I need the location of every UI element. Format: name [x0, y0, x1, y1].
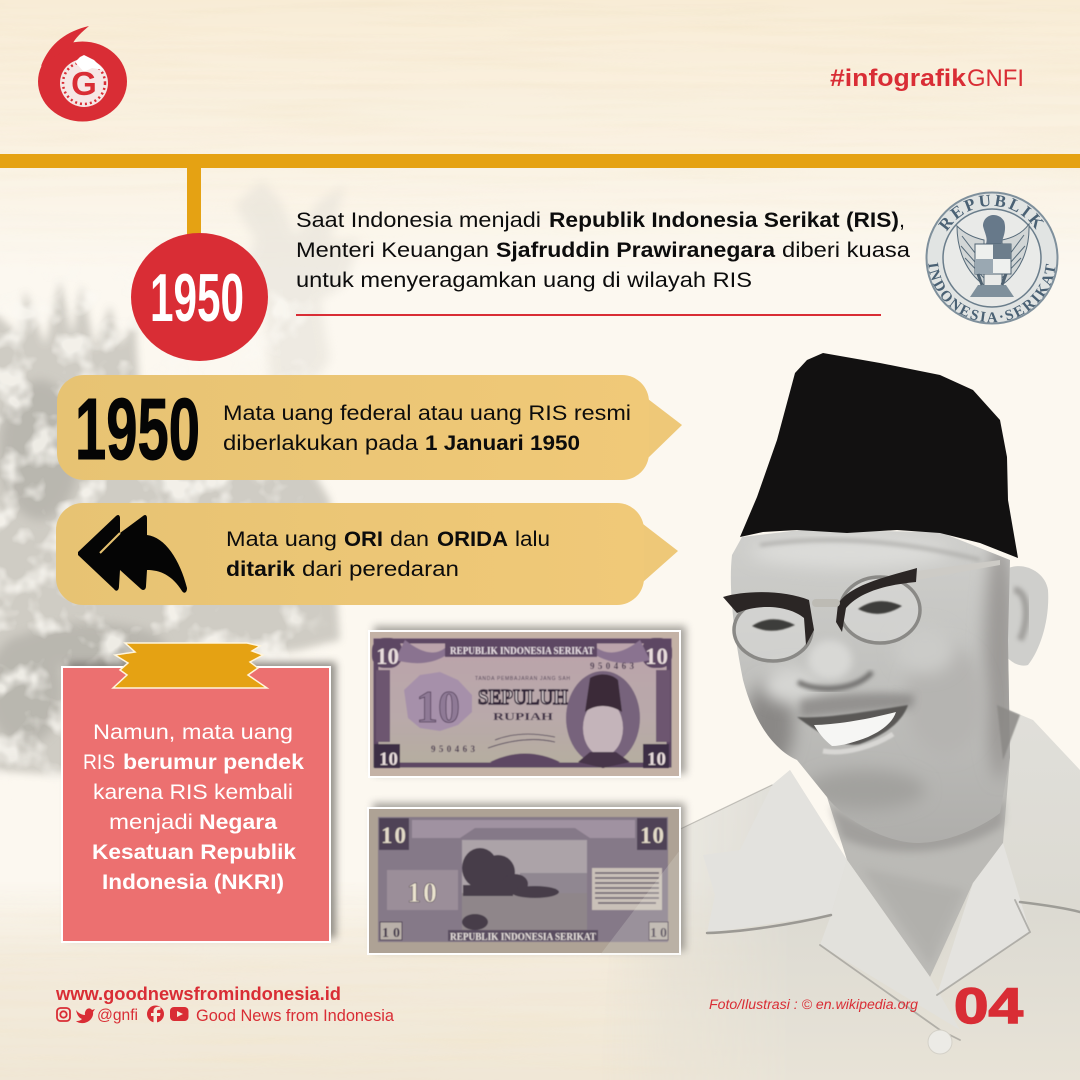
portrait of Sjafruddin Prawiranegara: [672, 353, 1080, 1054]
banknote back: 10 rupiah: 10: [407, 878, 437, 909]
band text: ditarik: [226, 557, 295, 581]
eyeglasses: [723, 560, 1000, 661]
seal: Republik Indonesia Serikat: INDONESIA·SERIKAT: [928, 262, 1056, 322]
band text: [226, 527, 550, 581]
portrait oval on note: [566, 671, 640, 768]
hashtag #infografikGNFI: #infografik: [830, 65, 967, 92]
year badge 1950: [131, 233, 268, 361]
footer website and social: [55, 984, 395, 1025]
tape: [113, 643, 267, 688]
banknote front: 10 rupiah: 10: [416, 681, 460, 732]
logo GNFI: [38, 26, 127, 122]
info band: 1 Januari 1950: [57, 375, 682, 480]
banknote front: 10 rupiah: 950463: [590, 661, 634, 671]
intro paragraph: ,: [899, 208, 905, 232]
intro paragraph: Saat Indonesia menjadi: [296, 208, 541, 232]
callout note: RIS short-lived: [62, 643, 336, 942]
note text: karena RIS kembali: [93, 780, 293, 804]
banknote back: 10 rupiah: REPUBLIK INDONESIA SERIKAT: [450, 932, 596, 943]
seal: Republik Indonesia Serikat: [926, 192, 1058, 324]
band text: diberlakukan pada: [223, 431, 418, 455]
band text: lalu: [515, 527, 550, 551]
band text: dari peredaran: [302, 557, 459, 581]
note text: Negara: [199, 810, 278, 834]
banknote front: 10 rupiah: 950463: [431, 744, 476, 754]
banknote front: 10 rupiah: RUPIAH: [493, 712, 553, 723]
icon: reply-all arrow: [78, 515, 187, 593]
banknote front: 10 rupiah: SEPULUH: [478, 685, 568, 709]
banknote back: 10 rupiah: 10: [382, 926, 400, 941]
icon: youtube: [170, 1007, 188, 1021]
banknote back: 10 rupiah: [368, 803, 685, 955]
intro paragraph: Sjafruddin Prawiranegara: [496, 238, 776, 262]
banknote front: 10 rupiah: [369, 626, 686, 777]
intro paragraph: Republik Indonesia Serikat (RIS): [549, 208, 899, 232]
collar: [672, 770, 1080, 1040]
banknote front: 10 rupiah: 10: [645, 644, 668, 669]
footer website and social: www.goodnewsfromindonesia.id: [55, 984, 341, 1004]
intro paragraph: untuk menyeragamkan uang di wilayah RIS: [296, 268, 752, 292]
background photo: portrait subject shirt: [649, 710, 1080, 1080]
banknote back: 10 rupiah: 10: [650, 926, 667, 941]
footer website and social: Good News from Indonesia: [196, 1006, 395, 1025]
banknote front: 10 rupiah: 10: [379, 749, 398, 770]
banknote back: 10 rupiah: 10: [640, 823, 664, 848]
intro paragraph: [296, 208, 910, 292]
band text: Mata uang federal atau uang RIS resmi: [223, 401, 631, 425]
hashtag #infografikGNFI: GNFI: [967, 65, 1024, 92]
mouth and teeth: [797, 705, 908, 752]
landscape scene: [462, 840, 587, 930]
icon: instagram: [57, 1008, 70, 1021]
banknote front: 10 rupiah: TANDA PEMBAJARAN JANG SAH: [475, 676, 570, 682]
band text: ORI: [344, 527, 383, 551]
icon: twitter: [76, 1008, 95, 1023]
intro paragraph: diberi kuasa: [782, 238, 910, 262]
page number: 04: [954, 978, 1023, 1034]
info band: ORI and ORIDA withdrawn: [56, 503, 678, 605]
note text: Namun, mata uang: [93, 720, 293, 744]
footer website and social: @gnfi: [97, 1007, 138, 1024]
hashtag #infografikGNFI: [830, 65, 1024, 92]
background photo: palm trees landscape: [0, 180, 360, 800]
ear: [1000, 566, 1048, 666]
year badge 1950: 1950: [150, 260, 244, 336]
neck: [827, 680, 1010, 977]
band text: 1 Januari 1950: [425, 431, 580, 455]
band text: dan: [390, 527, 429, 551]
photo credit: Foto/Ilustrasi : © en.wikipedia.org: [709, 997, 919, 1012]
face: [730, 530, 1010, 843]
gold timeline bar: [0, 154, 1080, 238]
intro paragraph: Menteri Keuangan: [296, 238, 489, 262]
banknote front: 10 rupiah: 10: [376, 644, 399, 669]
seal: Republik Indonesia Serikat: REPUBLIK: [938, 194, 1044, 232]
note text: Kesatuan Republik: [92, 840, 296, 864]
banknote front: 10 rupiah: 10: [647, 749, 666, 770]
nose: [798, 640, 872, 689]
note text: [83, 720, 304, 894]
note text: RIS: [83, 750, 115, 774]
icon: facebook: [147, 1006, 164, 1023]
shirt inner collar shadow and button: [997, 705, 1020, 760]
logo GNFI: G: [71, 65, 97, 102]
fez hat: [740, 353, 1018, 558]
red divider under intro: [296, 314, 881, 316]
banknote front: 10 rupiah: REPUBLIK INDONESIA SERIKAT: [450, 645, 595, 657]
band text: [223, 401, 631, 455]
note text: berumur pendek: [123, 750, 304, 774]
big year 1950: 1950: [75, 381, 200, 478]
band text: Mata uang: [226, 527, 337, 551]
note text: Indonesia (NKRI): [102, 870, 284, 894]
eagle emblem: [957, 215, 1029, 297]
note text: menjadi: [109, 810, 193, 834]
band text: ORIDA: [437, 527, 508, 551]
banknote back: 10 rupiah: 10: [381, 823, 406, 848]
